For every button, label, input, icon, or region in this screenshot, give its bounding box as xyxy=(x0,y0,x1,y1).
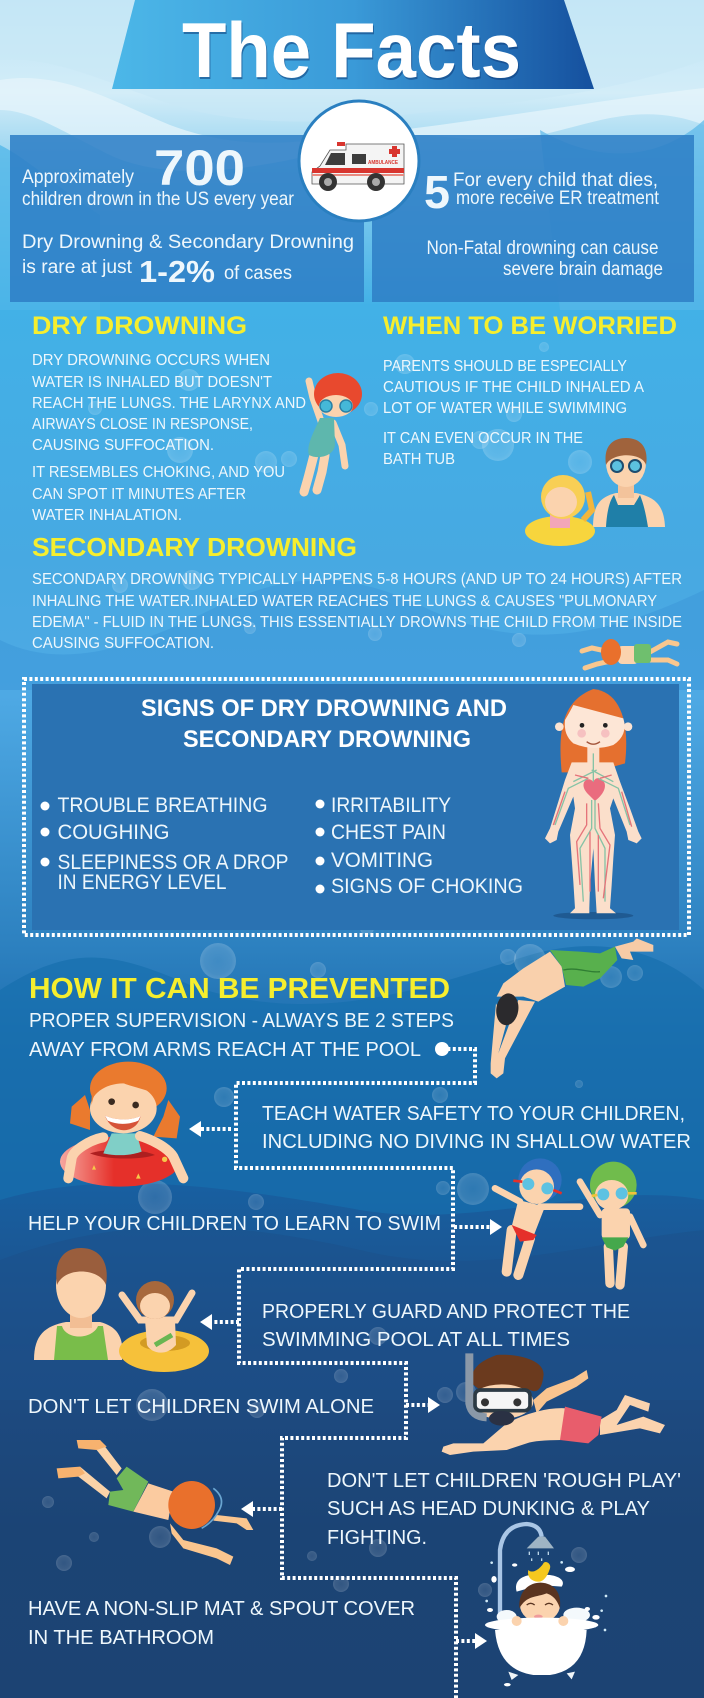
title banner xyxy=(112,0,594,94)
title: The Facts xyxy=(182,6,521,94)
stat: 1-2% of cases xyxy=(22,232,354,289)
list: right column: IRRITABILITY xyxy=(331,794,451,817)
icon: snorkel boy xyxy=(442,1353,665,1455)
body text: REACH THE LUNGS. THE LARYNX AND xyxy=(32,395,306,412)
body text: LOT OF WATER WHILE SWIMMING xyxy=(383,400,627,417)
body text: CAUSING SUFFOCATION. xyxy=(32,437,214,454)
heading xyxy=(141,695,507,753)
tip: learn to swim: HELP YOUR CHILDREN TO LEARN TO SWIM xyxy=(28,1213,441,1235)
arrow: to girl in red ring xyxy=(189,1121,231,1137)
arrow: to bathtub xyxy=(456,1633,487,1649)
section: dry drowning xyxy=(32,312,306,524)
list: right column: VOMITING xyxy=(331,849,433,872)
body text xyxy=(32,352,306,524)
tip: don't swim alone: DON'T LET CHILDREN SWIM ALONE xyxy=(28,1396,374,1418)
tip: rough play xyxy=(327,1470,681,1549)
icon: ambulance in circle: AMBULANCE xyxy=(368,160,399,166)
body text: AIRWAYS CLOSE IN RESPONSE, xyxy=(32,416,253,433)
tip: proper supervision: PROPER SUPERVISION - ALWAYS BE 2 STEPS xyxy=(29,1010,454,1032)
fact: brain damage: Non-Fatal drowning can cause xyxy=(426,238,658,259)
tip: rough play: FIGHTING. xyxy=(327,1527,427,1549)
body text xyxy=(32,571,682,652)
stat: 5 more receive ER treatment: For every child that dies, xyxy=(453,170,658,191)
icon: two kids swimming xyxy=(495,1158,643,1285)
arrow: to man and child xyxy=(200,1314,239,1330)
tip: guard the pool xyxy=(262,1301,630,1351)
icon: girl with circulatory system xyxy=(545,689,642,919)
list: left column: COUGHING xyxy=(58,821,170,844)
background bubbles xyxy=(42,342,643,1597)
tip: rough play: DON'T LET CHILDREN 'ROUGH PLAY' xyxy=(327,1470,681,1492)
stat: 5 more receive ER treatment xyxy=(424,166,660,218)
arrow: to two kids xyxy=(454,1219,502,1235)
stat: 1-2% of cases: 1-2% xyxy=(139,254,215,289)
section: secondary drowning xyxy=(32,532,682,652)
icon: diving man xyxy=(491,938,653,1078)
list: right column: CHEST PAIN xyxy=(331,821,446,844)
list: left column: IN ENERGY LEVEL xyxy=(58,871,226,894)
stat: 1-2% of cases: Dry Drowning & Secondary Drowning xyxy=(22,232,354,253)
stat: 700 children: Approximately xyxy=(22,167,134,188)
tip: guard the pool: SWIMMING POOL AT ALL TIMES xyxy=(262,1329,570,1351)
list: right column xyxy=(316,794,523,898)
heading: SECONDARY DROWNING xyxy=(183,726,471,753)
icon: man and child with yellow ring xyxy=(34,1248,209,1372)
body text: INHALING THE WATER.INHALED WATER REACHES THE LUNGS & CAUSES "PULMONARY xyxy=(32,593,657,610)
tip: teach water safety xyxy=(262,1103,691,1153)
tip: non-slip mat: HAVE A NON-SLIP MAT & SPOUT COVER xyxy=(28,1598,415,1620)
panel: left facts xyxy=(10,135,364,302)
fact: brain damage: severe brain damage xyxy=(503,259,663,280)
icon: ambulance in circle xyxy=(299,101,419,221)
stat: 1-2% of cases: is rare at just xyxy=(22,257,133,278)
body text xyxy=(383,358,644,468)
panel: signs of dry and secondary drowning xyxy=(24,679,689,935)
stat: 5 more receive ER treatment: more receive ER treatment xyxy=(456,188,660,209)
body text: WATER INHALATION. xyxy=(32,507,182,524)
body text: IT CAN EVEN OCCUR IN THE xyxy=(383,430,583,447)
icon: underwater swimmer xyxy=(57,1440,253,1565)
body text: IT RESEMBLES CHOKING, AND YOU xyxy=(32,464,285,481)
body text: WATER IS INHALED BUT DOESN'T xyxy=(32,374,272,391)
tip: guard the pool: PROPERLY GUARD AND PROTECT THE xyxy=(262,1301,630,1323)
stat: 5 more receive ER treatment: 5 xyxy=(424,166,450,218)
icon: girl in red swim ring xyxy=(60,1062,183,1187)
section: when to be worried xyxy=(383,312,677,468)
heading: SECONDARY DROWNING xyxy=(32,532,357,562)
body text: CAN SPOT IT MINUTES AFTER xyxy=(32,486,246,503)
section: how it can be prevented xyxy=(29,973,454,1061)
arrow: to underwater swimmer xyxy=(241,1501,282,1517)
body text: BATH TUB xyxy=(383,451,455,468)
heading: WHEN TO BE WORRIED xyxy=(383,312,677,340)
fact: brain damage xyxy=(426,238,663,280)
stat: 700 children xyxy=(22,140,295,210)
list: left column: SLEEPINESS OR A DROP xyxy=(58,851,288,874)
list: left column: TROUBLE BREATHING xyxy=(58,794,268,817)
tip: teach water safety: TEACH WATER SAFETY TO YOUR CHILDREN, xyxy=(262,1103,685,1125)
stat: 1-2% of cases: of cases xyxy=(224,263,292,284)
list: right column: SIGNS OF CHOKING xyxy=(331,875,523,898)
stat: 700 children: 700 xyxy=(154,140,245,196)
tip: rough play: SUCH AS HEAD DUNKING & PLAY xyxy=(327,1498,650,1520)
stat: 700 children: children drown in the US every year xyxy=(22,189,295,210)
body text: PARENTS SHOULD BE ESPECIALLY xyxy=(383,358,627,375)
heading: DRY DROWNING xyxy=(32,312,247,340)
arrow: to snorkel boy xyxy=(406,1397,440,1413)
tip: proper supervision: AWAY FROM ARMS REACH AT THE POOL xyxy=(29,1039,421,1061)
icon: small swimmer xyxy=(582,639,677,668)
list: left column xyxy=(40,794,288,894)
icon: child in bathtub with shower and duck xyxy=(485,1524,607,1686)
heading: SIGNS OF DRY DROWNING AND xyxy=(141,695,507,722)
tip: teach water safety: INCLUDING NO DIVING IN SHALLOW WATER xyxy=(262,1131,691,1153)
body text: CAUSING SUFFOCATION. xyxy=(32,635,214,652)
heading: HOW IT CAN BE PREVENTED xyxy=(29,973,450,1005)
icon: girl swimmer with red cap xyxy=(304,373,362,492)
body text: CAUTIOUS IF THE CHILD INHALED A xyxy=(383,379,644,396)
tip: proper supervision xyxy=(29,1010,454,1061)
body text: DRY DROWNING OCCURS WHEN xyxy=(32,352,270,369)
tip: non-slip mat xyxy=(28,1598,415,1649)
dotted connector path xyxy=(189,1042,502,1698)
icon: parent and child in yellow ring xyxy=(525,438,665,546)
tip: non-slip mat: IN THE BATHROOM xyxy=(28,1627,214,1649)
panel: right facts xyxy=(372,135,694,302)
